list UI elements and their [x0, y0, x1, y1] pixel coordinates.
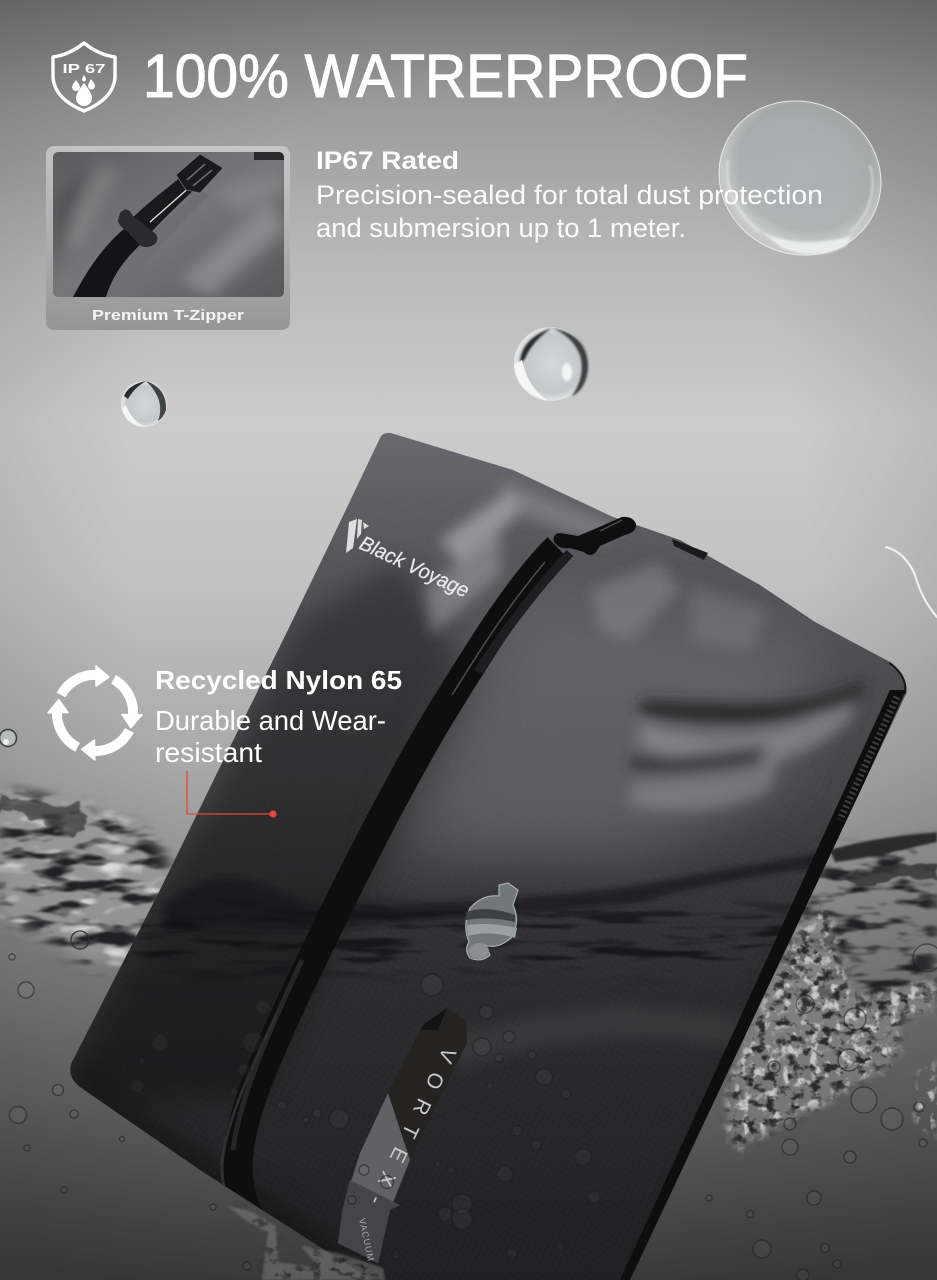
splash: right water surface — [770, 832, 937, 1010]
left panel shade — [60, 560, 470, 1100]
zipper track — [238, 548, 558, 1240]
callout leader line — [187, 771, 277, 818]
droplet: tiny — [0, 730, 16, 746]
water bubbles — [9, 944, 937, 1280]
water wisp — [886, 547, 937, 617]
right panel light — [400, 590, 820, 860]
brand logo mark — [346, 519, 369, 553]
vortex strip — [338, 1008, 467, 1263]
valve — [466, 883, 518, 960]
zipper pull — [554, 517, 636, 555]
purple tag — [672, 539, 708, 560]
splash: left water surface — [0, 790, 170, 968]
nylon description line 2: resistant — [155, 737, 262, 768]
icon: IP67 shield — [53, 43, 115, 111]
bag — [60, 425, 920, 1280]
IP67 description line 1: Precision-sealed for total dust protection — [316, 180, 823, 210]
top highlight folds — [425, 480, 770, 650]
brand name: Black Voyage — [356, 532, 473, 602]
right side seam — [620, 690, 906, 1280]
droplet: large — [694, 74, 906, 282]
droplet: small — [121, 381, 167, 427]
IP67 description line 2: and submersion up to 1 meter. — [316, 213, 686, 243]
vortex wordmark: VORTEX- — [364, 1044, 460, 1208]
zipper photo — [53, 152, 285, 297]
nylon heading: Recycled Nylon 65 — [155, 665, 402, 695]
bag body — [60, 425, 920, 1280]
thumbnail caption: Premium T-Zipper — [92, 307, 244, 324]
lower dark shading — [102, 1098, 332, 1250]
vacuum label: VACUUM — [357, 1217, 376, 1263]
mid fabric folds — [630, 680, 865, 811]
water line on bag — [120, 850, 850, 973]
nylon description line 1: Durable and Wear- — [155, 705, 386, 736]
water drops — [72, 75, 95, 106]
IP67 heading: IP67 Rated — [316, 147, 459, 175]
droplet: medium — [514, 327, 588, 401]
text block: recycled nylon — [155, 665, 402, 768]
text block: IP67 — [316, 147, 823, 243]
panel: zipper thumbnail card — [46, 146, 290, 330]
icon: recycle arrows — [48, 666, 143, 760]
splash: bottom foam — [227, 1205, 385, 1280]
shield label: IP 67 — [62, 62, 106, 76]
title: 100% WATRERPROOF — [143, 42, 748, 110]
splash: right foam — [728, 905, 937, 1150]
